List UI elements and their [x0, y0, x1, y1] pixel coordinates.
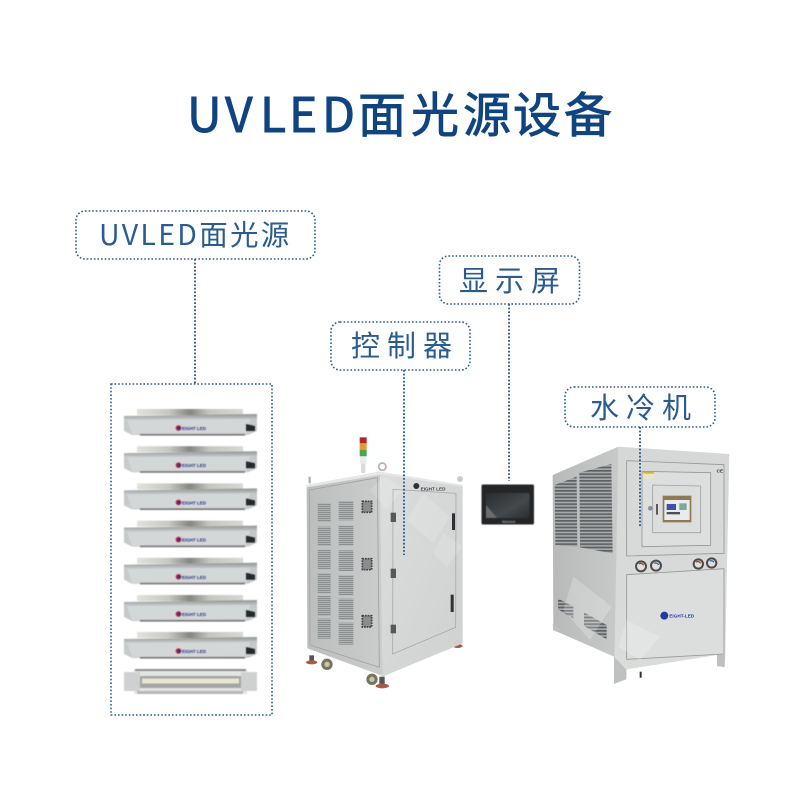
- door outline: [393, 489, 456, 654]
- watermark facets: [563, 577, 660, 660]
- control box frame: [642, 471, 711, 547]
- pressure gauges: [636, 558, 716, 571]
- lamp 5: [124, 558, 257, 584]
- label: water chiller: 水冷机: [590, 385, 698, 427]
- label: UVLED light source: UVLED面光源: [99, 213, 292, 254]
- drain plug: [640, 672, 642, 678]
- lamp 7: EIGHT LED: [182, 649, 207, 654]
- label: display: [440, 256, 580, 304]
- label: controller: [331, 322, 470, 370]
- controller cabinet: [306, 437, 463, 688]
- temperature controller: [663, 496, 691, 522]
- watermark facets: [370, 477, 463, 567]
- lower side vents: [558, 598, 607, 639]
- cabinet right face: [380, 472, 463, 677]
- lamp 2: [124, 446, 257, 473]
- gauge accents: [639, 561, 714, 565]
- lamp 4: EIGHT LED: [182, 538, 207, 543]
- CE mark: CE: [717, 468, 723, 473]
- chiller front face: [614, 447, 729, 684]
- power switch: [711, 573, 722, 583]
- lower front panel: [627, 569, 724, 659]
- cabinet logo: EIGHT LED: [421, 486, 446, 491]
- cabinet top edge: [307, 472, 463, 487]
- feet and casters: [306, 639, 463, 688]
- lamp 6: [124, 595, 257, 622]
- lamp 3: EIGHT LED: [182, 500, 207, 505]
- lamp 1: EIGHT LED: [182, 426, 207, 431]
- controller inner door: [653, 485, 701, 533]
- side louvers: [555, 464, 613, 553]
- door hinges: [391, 513, 396, 633]
- chiller logo: EIGHT-LED: [669, 613, 695, 618]
- lamp 1: [124, 409, 257, 436]
- left panel outline: [309, 478, 379, 667]
- label: controller: 控制器: [351, 323, 459, 365]
- signal tower light: [360, 437, 367, 473]
- vents column 2: [339, 501, 353, 645]
- water chiller: [553, 447, 729, 684]
- lamp 7: [124, 632, 257, 659]
- door latch: [648, 501, 658, 515]
- connector: controller label to cabinet: [403, 370, 405, 555]
- connector: light source label to panel: [194, 259, 196, 384]
- lamp: front view with LEDs: [124, 669, 257, 694]
- title: UVLED面光源设备: [187, 76, 612, 146]
- lifting eyes: [309, 463, 463, 483]
- fans: [362, 501, 372, 627]
- lamp 3: [124, 483, 257, 510]
- vents column 1: [318, 503, 331, 639]
- chiller side face: [553, 447, 619, 683]
- panel: UVLED lamp stack: [111, 384, 272, 715]
- door handles: [451, 513, 455, 612]
- cabinet logo: [413, 483, 446, 491]
- chiller logo: [660, 612, 695, 620]
- touch screen display: [482, 484, 534, 524]
- cabinet left face: [307, 472, 383, 676]
- touch screen display: Weintek: [502, 520, 515, 524]
- lamp 5: EIGHT LED: [182, 575, 207, 580]
- connector: display label to screen: [508, 304, 510, 481]
- lamp 6: EIGHT LED: [182, 612, 207, 617]
- chiller feet: [553, 624, 725, 684]
- label: UVLED light source: [76, 211, 315, 259]
- warning sticker: [643, 472, 654, 479]
- connector: chiller label to chiller: [639, 427, 641, 526]
- label: display: 显示屏: [459, 258, 567, 300]
- lamp 4: [124, 521, 257, 547]
- upper front panel: [627, 461, 724, 556]
- lamp 2: EIGHT LED: [182, 463, 207, 468]
